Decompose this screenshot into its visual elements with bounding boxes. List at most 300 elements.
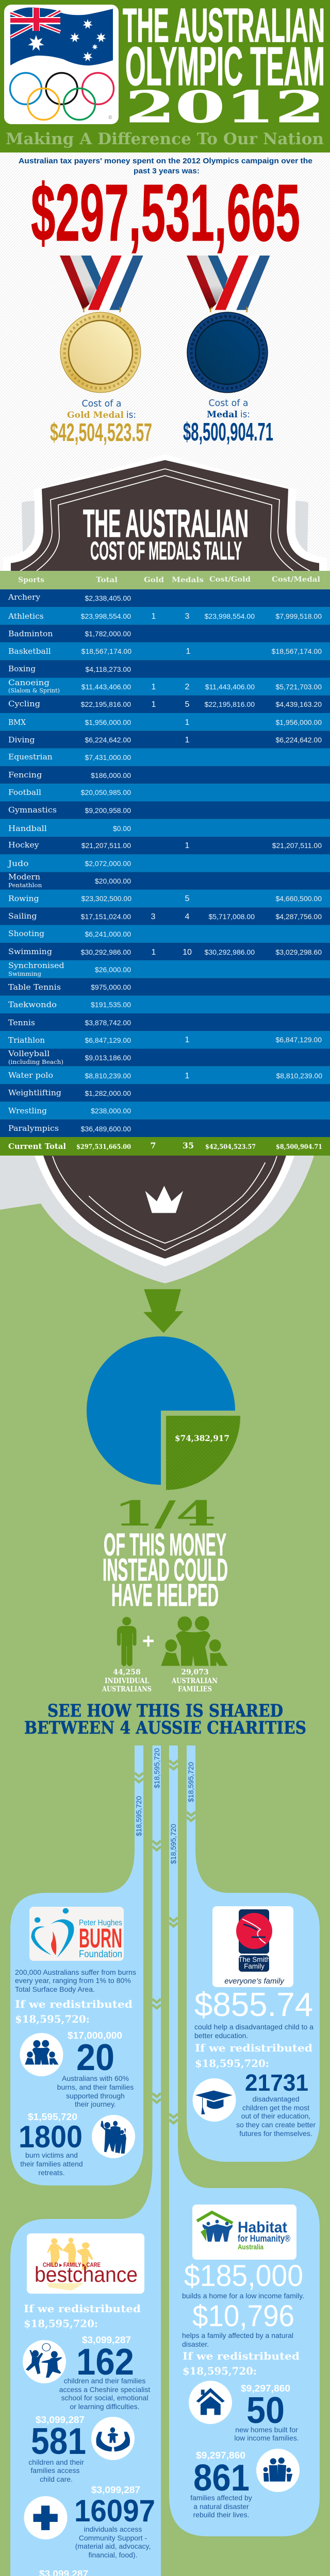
- logo: habitat for humanity: [192, 2205, 296, 2260]
- row: Handball: $0.00: [113, 824, 131, 833]
- logo: burn foundation: Foundation: [79, 1949, 122, 1960]
- row: Boxing: [0, 660, 330, 678]
- row: Cycling: $22,195,816.00: [205, 700, 255, 708]
- stat: 581 children: child care.: [40, 2475, 73, 2483]
- stat: 50 homes: new homes built for: [235, 2426, 298, 2434]
- row: Athletics: [0, 607, 330, 625]
- medals table: [0, 571, 330, 1156]
- header panel: [0, 0, 330, 152]
- row: Cycling: $22,195,816.00: [81, 700, 131, 708]
- cost headlines: [182, 2259, 304, 2348]
- row: BMX: $1,956,000.00: [275, 718, 322, 726]
- stat: 16097 individuals: [24, 2485, 155, 2559]
- row: Rowing: 5: [185, 894, 190, 903]
- stat: 21731 children: 21731: [245, 2070, 308, 2096]
- description: 200,000 Australians suffer from burns: [15, 1968, 136, 1976]
- intro text: Australian tax payers' money spent on the 2012 Olympics campaign over the: [19, 157, 312, 165]
- stat: 162 children: school for social, emotional: [61, 2394, 148, 2402]
- logo: burn foundation: BURN: [79, 1923, 122, 1954]
- row: Wrestling: [0, 1101, 330, 1120]
- row: Paralympics: Paralympics: [8, 1124, 59, 1133]
- row: Fencing: $186,000.00: [91, 771, 131, 779]
- stat: 20 Australians: 20: [76, 2037, 114, 2078]
- row: Diving: [0, 731, 330, 749]
- row: Diving: 1: [185, 736, 190, 744]
- medal caption: Cost of a: [208, 398, 249, 409]
- row: Football: [0, 784, 330, 802]
- row: Judo: $2,072,000.00: [85, 859, 131, 868]
- stat: 861 families: 861: [193, 2458, 250, 2499]
- pie slice: one quarter: [166, 1416, 240, 1490]
- table header: Total: [96, 576, 118, 584]
- title: 2012: [125, 81, 325, 132]
- flow amounts: $18,595,720: [135, 1796, 143, 1836]
- stat: 16097 individuals: individuals access: [84, 2525, 142, 2533]
- row: Gymnastics: Gymnastics: [8, 805, 57, 815]
- flow amounts: $18,595,720: [153, 1748, 161, 1788]
- icon: blue medal disc: [187, 312, 268, 393]
- row: Badminton: Badminton: [8, 629, 53, 638]
- intro text: [19, 157, 312, 176]
- panel: Peter Hughes Burn Foundation: [15, 1907, 136, 2177]
- row: Canoeing: 1: [152, 683, 156, 691]
- icon: family: [161, 1616, 228, 1666]
- row: Water polo: $8,810,239.00: [85, 1072, 131, 1080]
- families label: [171, 1668, 218, 1693]
- row: Paralympics: $36,489,600.00: [81, 1125, 131, 1133]
- row: Volleyball: $9,013,186.00: [85, 1054, 131, 1062]
- row: Athletics: 1: [152, 612, 156, 621]
- row: Diving: $6,224,642.00: [85, 736, 131, 744]
- icon: person: [117, 1617, 136, 1666]
- row: Volleyball: (including Beach): [8, 1059, 63, 1065]
- row: Sailing: $5,717,008.00: [208, 912, 255, 921]
- row: Football: $20,050,985.00: [81, 788, 131, 796]
- row: Canoeing: (Slalom & Sprint): [8, 687, 60, 694]
- section heading: SEE HOW THIS IS SHARED: [47, 1701, 283, 1721]
- stat: 20 Australians: supported through: [66, 2092, 125, 2100]
- stat: 21731 children: futures for themselves.: [239, 2129, 312, 2138]
- arrow down: [143, 1289, 184, 1333]
- icon: gold medal ribbon: [60, 256, 143, 310]
- row: Fencing: [0, 766, 330, 784]
- stat: 162 children: 162: [76, 2342, 134, 2383]
- title: [123, 0, 325, 132]
- any medal: [183, 256, 273, 446]
- gold medal: [50, 256, 152, 447]
- panel: Habitat for Humanity: [182, 2205, 304, 2519]
- stat: 861 families: $9,297,860: [196, 2450, 245, 2461]
- row: Tennis: [0, 1013, 330, 1031]
- panel: The Smith Family: [193, 1906, 316, 2138]
- cost headlines: $10,796: [192, 2299, 294, 2333]
- stat: 861 families: a natural disaster: [193, 2502, 249, 2511]
- row: Modern Pentathlon: Modern: [8, 872, 40, 882]
- page background stripes: [0, 152, 330, 571]
- text: of this money instead could have helped: [103, 1527, 228, 1613]
- row: BMX: [0, 713, 330, 731]
- row: Gymnastics: $9,200,958.00: [85, 806, 131, 815]
- stat: 50 homes: $9,297,860: [241, 2383, 290, 2394]
- cost headlines: builds a home for a low income family.: [182, 2292, 304, 2300]
- logo: the smith family: The Smith: [238, 1956, 270, 1963]
- row: BMX: $1,956,000.00: [85, 718, 131, 726]
- row: Triathlon: $6,847,129.00: [275, 1036, 322, 1044]
- table header: Cost/Medal: [272, 575, 320, 584]
- stat: 1800 burn victims: $1,595,720: [28, 2112, 77, 2122]
- gold medal caption: Gold Medal: [67, 410, 124, 420]
- stat: 21731 children: children get the most: [242, 2104, 309, 2112]
- redistribution heading: $18,595,720:: [24, 2317, 98, 2330]
- redistribution heading: If we redistributed: [195, 2042, 312, 2054]
- row: Current Total: [0, 1137, 330, 1156]
- logo: habitat for humanity: for Humanity®: [238, 2233, 290, 2244]
- one quarter heading: 1/4: [113, 1494, 217, 1534]
- row: Archery: [0, 589, 330, 607]
- icon: plus: [143, 1636, 154, 1647]
- row: Boxing: Boxing: [8, 664, 36, 673]
- row: Triathlon: 1: [185, 1036, 190, 1044]
- row: Basketball: 1: [186, 647, 191, 656]
- individuals label: AUSTRALIANS: [102, 1685, 152, 1693]
- icon: hands holding baby: [96, 2427, 130, 2451]
- icon: family: [25, 2040, 58, 2064]
- icon: house: [196, 2388, 225, 2415]
- individuals label: 44,258: [113, 1668, 141, 1676]
- row: Canoeing: 2: [185, 683, 190, 691]
- icon: waving family: [101, 2121, 126, 2154]
- stat: 162 children: access a Cheshire specialist: [59, 2385, 150, 2394]
- flow amounts: $18,595,720: [187, 1762, 195, 1802]
- redistribution heading: [15, 1998, 133, 2025]
- row: Triathlon: [0, 1031, 330, 1049]
- row: Diving: Diving: [8, 735, 35, 744]
- redistribution heading: If we redistributed: [24, 2302, 141, 2315]
- row: Gymnastics: [0, 802, 330, 819]
- people helped: [102, 1616, 228, 1693]
- cost headlines: disaster.: [182, 2340, 209, 2348]
- row: Cycling: 5: [185, 700, 190, 709]
- stat: 16097 individuals: Community Support -: [79, 2534, 147, 2542]
- row: Rowing: $23,302,500.00: [81, 894, 131, 903]
- table header: [0, 571, 330, 589]
- description: Total Surface Body Area.: [15, 1985, 95, 1993]
- row: Shooting: Shooting: [8, 929, 44, 938]
- gold medal caption: $42,504,523.57: [50, 419, 152, 447]
- row: Canoeing: $11,443,406.00: [81, 683, 131, 691]
- row: Current Total: Current Total: [8, 1142, 66, 1151]
- stat: 16097 individuals: financial, food).: [89, 2551, 137, 2559]
- row: Water polo: 1: [185, 1072, 190, 1080]
- row: Synchronised Swimming: [0, 960, 330, 978]
- row: Hockey: $21,207,511.00: [272, 841, 322, 850]
- row: Current Total: $297,531,665.00: [76, 1143, 131, 1151]
- row: Sailing: Sailing: [8, 911, 37, 921]
- charity panel shape: smith family: [187, 1745, 320, 2162]
- gold medal caption: Cost of a: [81, 398, 122, 409]
- stat: 861 families: families affected by: [190, 2494, 252, 2502]
- logo: bestchance: CHILD ▸ FAMILY ▸ CARE: [43, 2261, 101, 2268]
- charity panel shape: bestchance: [10, 1745, 161, 2576]
- medal caption: is:: [240, 409, 250, 420]
- row: Boxing: $4,118,273.00: [86, 665, 131, 673]
- row: Handball: Handball: [8, 824, 47, 833]
- stat: 162 children: children and their families: [64, 2377, 145, 2385]
- medal caption: [183, 398, 273, 446]
- row: Badminton: [0, 625, 330, 642]
- icon: children playing: [26, 2344, 62, 2378]
- stat: 1800 burn victims: 1800: [19, 2120, 82, 2154]
- shield bottom: [0, 1156, 314, 1283]
- row: BMX: BMX: [8, 718, 26, 727]
- row: Current Total: 7: [150, 1141, 156, 1150]
- cost headline: better education.: [194, 2031, 248, 2040]
- row: Swimming: 1: [152, 948, 156, 957]
- icon: gold medal disc: [60, 312, 141, 393]
- row: Basketball: [0, 642, 330, 660]
- row: Badminton: $1,782,000.00: [85, 630, 131, 638]
- row: Hockey: [0, 837, 330, 854]
- stat: 581 children: children and their: [28, 2458, 84, 2466]
- row: Sailing: 3: [151, 912, 156, 921]
- stat: 16097 individuals: (material aid, advocacy,: [75, 2542, 151, 2550]
- row: Triathlon: Triathlon: [8, 1036, 45, 1045]
- row: Equestrian: $7,431,000.00: [85, 753, 131, 761]
- row: Table Tennis: [0, 978, 330, 996]
- flow amounts: $18,595,720: [169, 1824, 177, 1864]
- text: of this money instead could have helped: HAVE HELPED: [111, 1578, 219, 1613]
- copyright mark: ©: [109, 115, 112, 120]
- stat: 20 Australians: [20, 2030, 134, 2108]
- shield top: [3, 454, 327, 571]
- cost headline: [194, 1986, 314, 2040]
- stat: 162 children: $3,099,287: [82, 2335, 131, 2345]
- stat: 50 homes: low income families.: [234, 2434, 299, 2442]
- row: Basketball: Basketball: [8, 647, 51, 656]
- pie chart: [87, 1336, 240, 1490]
- slice value: $74,382,917: [175, 1433, 229, 1443]
- stat: 20 Australians: $17,000,000: [68, 2030, 122, 2041]
- stat: 162 children: [23, 2335, 150, 2411]
- row: Basketball: $18,567,174.00: [272, 647, 322, 655]
- stat: 581 children: $3,099,287: [36, 2415, 85, 2425]
- row: Wrestling: $238,000.00: [91, 1107, 131, 1115]
- stat: 1800 burn victims: [19, 2112, 135, 2177]
- row: Triathlon: $6,847,129.00: [85, 1036, 131, 1044]
- table header: Medals: [172, 576, 204, 584]
- row: Canoeing: $11,443,406.00: [205, 683, 255, 691]
- row: Water polo: Water polo: [8, 1071, 53, 1080]
- row: Water polo: [0, 1066, 330, 1084]
- row: Synchronised Swimming: $26,000.00: [95, 965, 131, 974]
- row: Basketball: $18,567,174.00: [81, 647, 131, 655]
- redistribution heading: [24, 2302, 141, 2330]
- flow chevrons: [135, 1760, 195, 2123]
- row: Modern Pentathlon: [0, 872, 330, 890]
- row: Sailing: [0, 907, 330, 925]
- panel: bestchance: [21, 2233, 155, 2576]
- logo: burn foundation: Peter Hughes: [79, 1919, 122, 1927]
- row: Synchronised Swimming: Swimming: [8, 971, 41, 977]
- stat: 1800 burn victims: retreats.: [38, 2168, 65, 2177]
- table header: Gold: [144, 576, 164, 584]
- redistribution heading: [183, 2350, 300, 2377]
- row: Hockey: 1: [185, 841, 190, 850]
- row: Judo: Judo: [7, 859, 29, 868]
- logo: the smith family: [212, 1906, 293, 1987]
- row: Swimming: 10: [183, 948, 192, 957]
- icon: Olympic rings: [10, 73, 113, 120]
- row: Equestrian: Equestrian: [8, 752, 53, 761]
- stat: 50 homes: [189, 2381, 299, 2442]
- stat: 50 homes: 50: [246, 2390, 285, 2431]
- row: BMX: 1: [185, 718, 190, 727]
- stat: 21731 children: [193, 2070, 316, 2138]
- shield title: [83, 502, 249, 565]
- row: Equestrian: [0, 749, 330, 766]
- icon: blue medal ribbon: [187, 256, 270, 310]
- logo: the smith family: Family: [244, 1962, 265, 1970]
- row: Swimming: Swimming: [8, 947, 52, 956]
- redistribution heading: $18,595,720:: [15, 2013, 90, 2025]
- icon: cross: [33, 2505, 58, 2530]
- stat: 581 children: [28, 2415, 135, 2483]
- cost headlines: $185,000: [184, 2259, 303, 2293]
- row: Modern Pentathlon: Pentathlon: [8, 882, 42, 889]
- row: Current Total: $8,500,904.71: [276, 1143, 322, 1151]
- row: Wrestling: Wrestling: [8, 1106, 47, 1115]
- charity panel shape: habitat: [169, 1745, 320, 2536]
- green background section: [0, 1156, 330, 2576]
- families label: AUSTRALIAN: [171, 1677, 218, 1685]
- row: Shooting: $6,241,000.00: [85, 930, 131, 938]
- redistribution heading: [195, 2042, 312, 2070]
- row: Judo: [0, 854, 330, 872]
- stat: 20 Australians: Australians with 60%: [62, 2074, 129, 2082]
- row: Sailing: $17,151,024.00: [81, 912, 131, 921]
- stat: 581 children: 581: [31, 2421, 86, 2462]
- table header: Sports: [18, 576, 44, 584]
- row: Volleyball: Volleyball: [8, 1049, 50, 1058]
- row: Rowing: [0, 890, 330, 907]
- stat: 581 children: families access: [31, 2466, 79, 2475]
- gold medal caption: [50, 398, 152, 447]
- row: Swimming: [0, 943, 330, 960]
- redistribution heading: $18,595,720:: [195, 2057, 269, 2070]
- row: Weightlifting: [0, 1084, 330, 1101]
- section heading: [24, 1701, 306, 1738]
- families label: FAMILIES: [178, 1685, 212, 1693]
- row: Taekwondo: Taekwondo: [8, 1000, 57, 1009]
- gold medal caption: is:: [126, 410, 136, 420]
- description: [15, 1968, 136, 1993]
- logo: habitat for humanity: Habitat: [238, 2219, 287, 2236]
- logo: burn foundation: [29, 1907, 124, 1961]
- stat: 861 families: rebuild their lives.: [193, 2511, 249, 2519]
- row: Water polo: $8,810,239.00: [276, 1072, 322, 1080]
- row: Diving: $6,224,642.00: [275, 736, 322, 744]
- logo: the smith family: everyone's family: [224, 1977, 285, 1986]
- stat: 21731 children: out of their education,: [241, 2112, 310, 2120]
- cost headlines: helps a family affected by a natural: [182, 2331, 293, 2340]
- row: Rowing: Rowing: [8, 894, 39, 903]
- row: Football: Football: [8, 788, 41, 797]
- stat: 861 families: [190, 2449, 300, 2519]
- individuals label: [102, 1668, 152, 1693]
- row: Taekwondo: [0, 996, 330, 1013]
- description: every year, ranging from 1% to 80%: [15, 1976, 131, 1985]
- row: Current Total: $42,504,523.57: [205, 1143, 256, 1151]
- subtitle: Making A Difference To Our Nation: [6, 130, 324, 148]
- row: Cycling: 1: [152, 700, 156, 709]
- row: Rowing: $4,660,500.00: [275, 894, 322, 903]
- row: Current Total: 35: [183, 1141, 194, 1150]
- table header: Cost/Gold: [209, 575, 251, 584]
- row: Tennis: Tennis: [8, 1018, 35, 1027]
- row: Cycling: Cycling: [8, 699, 40, 708]
- families label: 29,073: [181, 1668, 209, 1676]
- logo card: flag and rings: [4, 5, 119, 124]
- stat: 16097 individuals: 16097: [74, 2494, 155, 2528]
- row: Athletics: Athletics: [8, 612, 44, 621]
- stat: 21731 children: so they can create better: [236, 2121, 316, 2129]
- logo: bestchance: bestchance: [35, 2262, 138, 2286]
- row: Fencing: Fencing: [8, 770, 42, 779]
- logo: bestchance: [27, 2233, 144, 2294]
- row: Athletics: $23,998,554.00: [81, 612, 131, 620]
- row: Modern Pentathlon: $20,000.00: [95, 877, 131, 885]
- individuals label: INDIVIDUAL: [105, 1677, 149, 1685]
- one quarter heading: [103, 1494, 228, 1613]
- row: Cycling: $4,439,163.20: [275, 700, 322, 708]
- stat: 16097 individuals: $3,099,287: [91, 2485, 140, 2495]
- row: Canoeing: $5,721,703.00: [275, 683, 322, 691]
- row: Tennis: $3,878,742.00: [85, 1019, 131, 1027]
- stat: 1800 burn victims: their families attend: [20, 2160, 83, 2168]
- row: Handball: [0, 819, 330, 837]
- logo: habitat for humanity: Australia: [238, 2243, 263, 2251]
- stat: 162 children: or learning difficulties.: [70, 2402, 140, 2411]
- icon: family of four: [263, 2458, 292, 2482]
- charity panel shape: burn foundation: [10, 1745, 143, 2185]
- stat: 21731 children: disadvantaged: [252, 2095, 300, 2103]
- row: Taekwondo: $191,535.00: [91, 1001, 131, 1009]
- row: Hockey: Hockey: [8, 840, 39, 850]
- row: Table Tennis: $975,000.00: [91, 983, 131, 991]
- cost headline: $855.74: [194, 1986, 313, 2023]
- row: Canoeing: [0, 678, 330, 696]
- intro text: past 3 years was:: [134, 167, 200, 176]
- medal caption: Medal: [207, 410, 238, 420]
- row: Swimming: $30,292,986.00: [205, 948, 255, 956]
- row: Athletics: 3: [185, 612, 190, 621]
- row: Canoeing: Canoeing: [8, 678, 50, 687]
- row: Paralympics: [0, 1120, 330, 1137]
- redistribution heading: If we redistributed: [15, 1998, 133, 2010]
- redistribution heading: If we redistributed: [183, 2350, 300, 2362]
- redistribution heading: $18,595,720:: [183, 2365, 257, 2377]
- row: Table Tennis: Table Tennis: [8, 982, 61, 992]
- row: Volleyball: [0, 1049, 330, 1066]
- row: Synchronised Swimming: Synchronised: [8, 961, 64, 970]
- flow amounts: [135, 1748, 195, 1864]
- icon: graduation cap: [195, 2091, 233, 2114]
- cost headline: could help a disadvantaged child to a: [194, 2023, 314, 2031]
- row: Archery: $2,338,405.00: [85, 594, 131, 602]
- row: Swimming: $30,292,986.00: [81, 948, 131, 956]
- stat: 1800 burn victims: burn victims and: [25, 2151, 78, 2159]
- row: Sailing: 4: [185, 912, 190, 921]
